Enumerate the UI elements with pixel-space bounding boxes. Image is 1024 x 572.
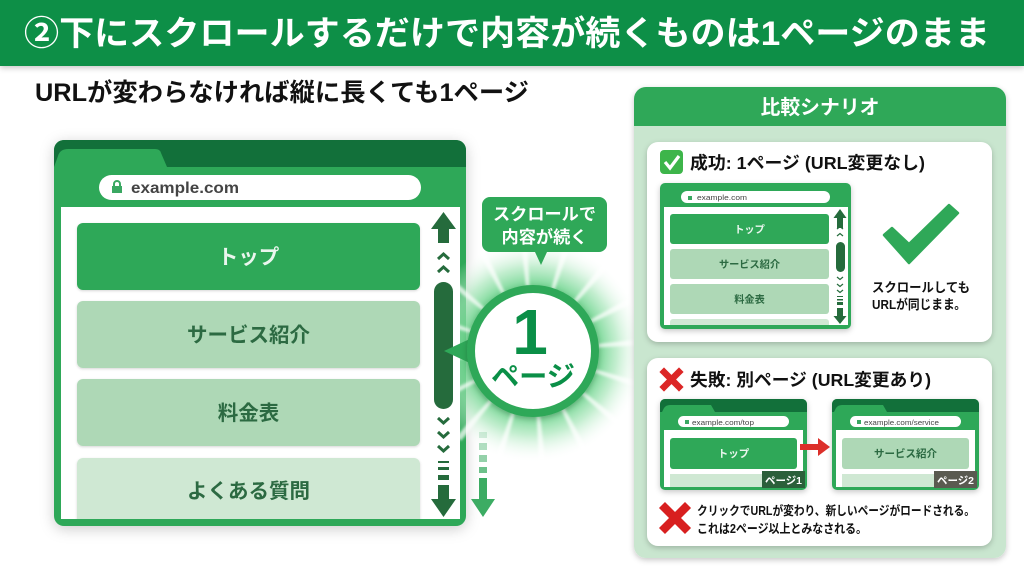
- content cards: [77, 223, 420, 533]
- glow with rays behind page badge: [460, 252, 634, 452]
- url text: example.com: [131, 180, 239, 197]
- callout line one: スクロールで: [493, 205, 596, 224]
- mini cards: [670, 214, 829, 331]
- browser: page 2: example.com/service: [864, 418, 939, 427]
- card: services: サービス紹介: [187, 324, 310, 347]
- page content area: [61, 207, 460, 519]
- page 1 badge: [762, 471, 805, 488]
- down chevrons: [438, 418, 449, 451]
- browser: page 1: example.com/top: [692, 418, 754, 427]
- panel: failure scenario: [647, 358, 992, 546]
- panel heading: 比較シナリオ: [760, 96, 880, 119]
- up chevrons: [438, 254, 449, 272]
- mini cards: サービス紹介: [719, 258, 780, 271]
- arrow: fading down arrow: [471, 432, 495, 517]
- subtitle: URLが変わらなければ縦に長くても1ページ: [35, 78, 529, 107]
- panel: main browser window: [54, 140, 466, 533]
- callout line two: 内容が続く: [502, 227, 588, 247]
- success note: スクロールしても: [872, 280, 970, 295]
- badge number: 1: [512, 296, 548, 368]
- icon: green check box: [660, 150, 683, 174]
- arrow: page transition: [800, 438, 830, 456]
- card: pricing: [77, 379, 420, 446]
- card: services: [77, 301, 420, 368]
- page 2 badge: [934, 471, 977, 488]
- mini cards: トップ: [734, 224, 765, 236]
- browser: page 1: [660, 399, 807, 490]
- badge: 1 page: [444, 289, 595, 413]
- success note: [872, 280, 970, 312]
- page 2 badge: ページ2: [937, 475, 974, 487]
- failure heading: 失敗: 別ページ (URL変更あり): [690, 370, 931, 390]
- failure note: これは2ページ以上とみなされる。: [697, 522, 867, 536]
- up arrow: [431, 212, 456, 243]
- title banner: [0, 0, 1024, 66]
- browser: page 2: [832, 399, 979, 490]
- icon: large red cross: [665, 508, 685, 528]
- browser: page 1: トップ: [718, 448, 750, 460]
- card: top: [77, 223, 420, 290]
- fading bars: [438, 461, 449, 480]
- failure note: [697, 503, 975, 536]
- panel: comparison scenarios: [634, 87, 1006, 558]
- mini cards: 料金表: [734, 293, 765, 306]
- success note: URLが同じまま。: [872, 297, 966, 312]
- success heading: 成功: 1ページ (URL変更なし): [690, 153, 925, 173]
- browser top dark band: [54, 140, 466, 167]
- mini browser: [660, 183, 851, 331]
- mini content area: [664, 207, 848, 325]
- card: faq: よくある質問: [187, 480, 310, 503]
- badge label: ページ: [491, 361, 575, 392]
- panel header: [634, 87, 1006, 126]
- browser: page 2: サービス紹介: [874, 447, 937, 460]
- scrollbar: [431, 212, 456, 517]
- icon: large check mark: [884, 205, 958, 263]
- address bar: [99, 175, 421, 200]
- failure note: クリックでURLが変わり、新しいページがロードされる。: [697, 503, 975, 518]
- mini scrollbar: [834, 209, 846, 324]
- card: faq: [76, 458, 421, 519]
- card: top: トップ: [218, 246, 280, 269]
- card: pricing: 料金表: [218, 402, 280, 425]
- lock icon: [112, 180, 122, 193]
- mini address bar: example.com: [697, 193, 747, 202]
- scroll thumb: [434, 282, 453, 409]
- mini address bar: [681, 191, 830, 203]
- title text: ②下にスクロールするだけで内容が続くものは1ページのまま: [24, 14, 990, 53]
- page 1 badge: ページ1: [765, 475, 802, 487]
- down arrow: [431, 485, 456, 517]
- panel: success scenario: [647, 142, 992, 342]
- icon: red cross: [664, 372, 679, 387]
- callout: scroll continues: [482, 197, 607, 265]
